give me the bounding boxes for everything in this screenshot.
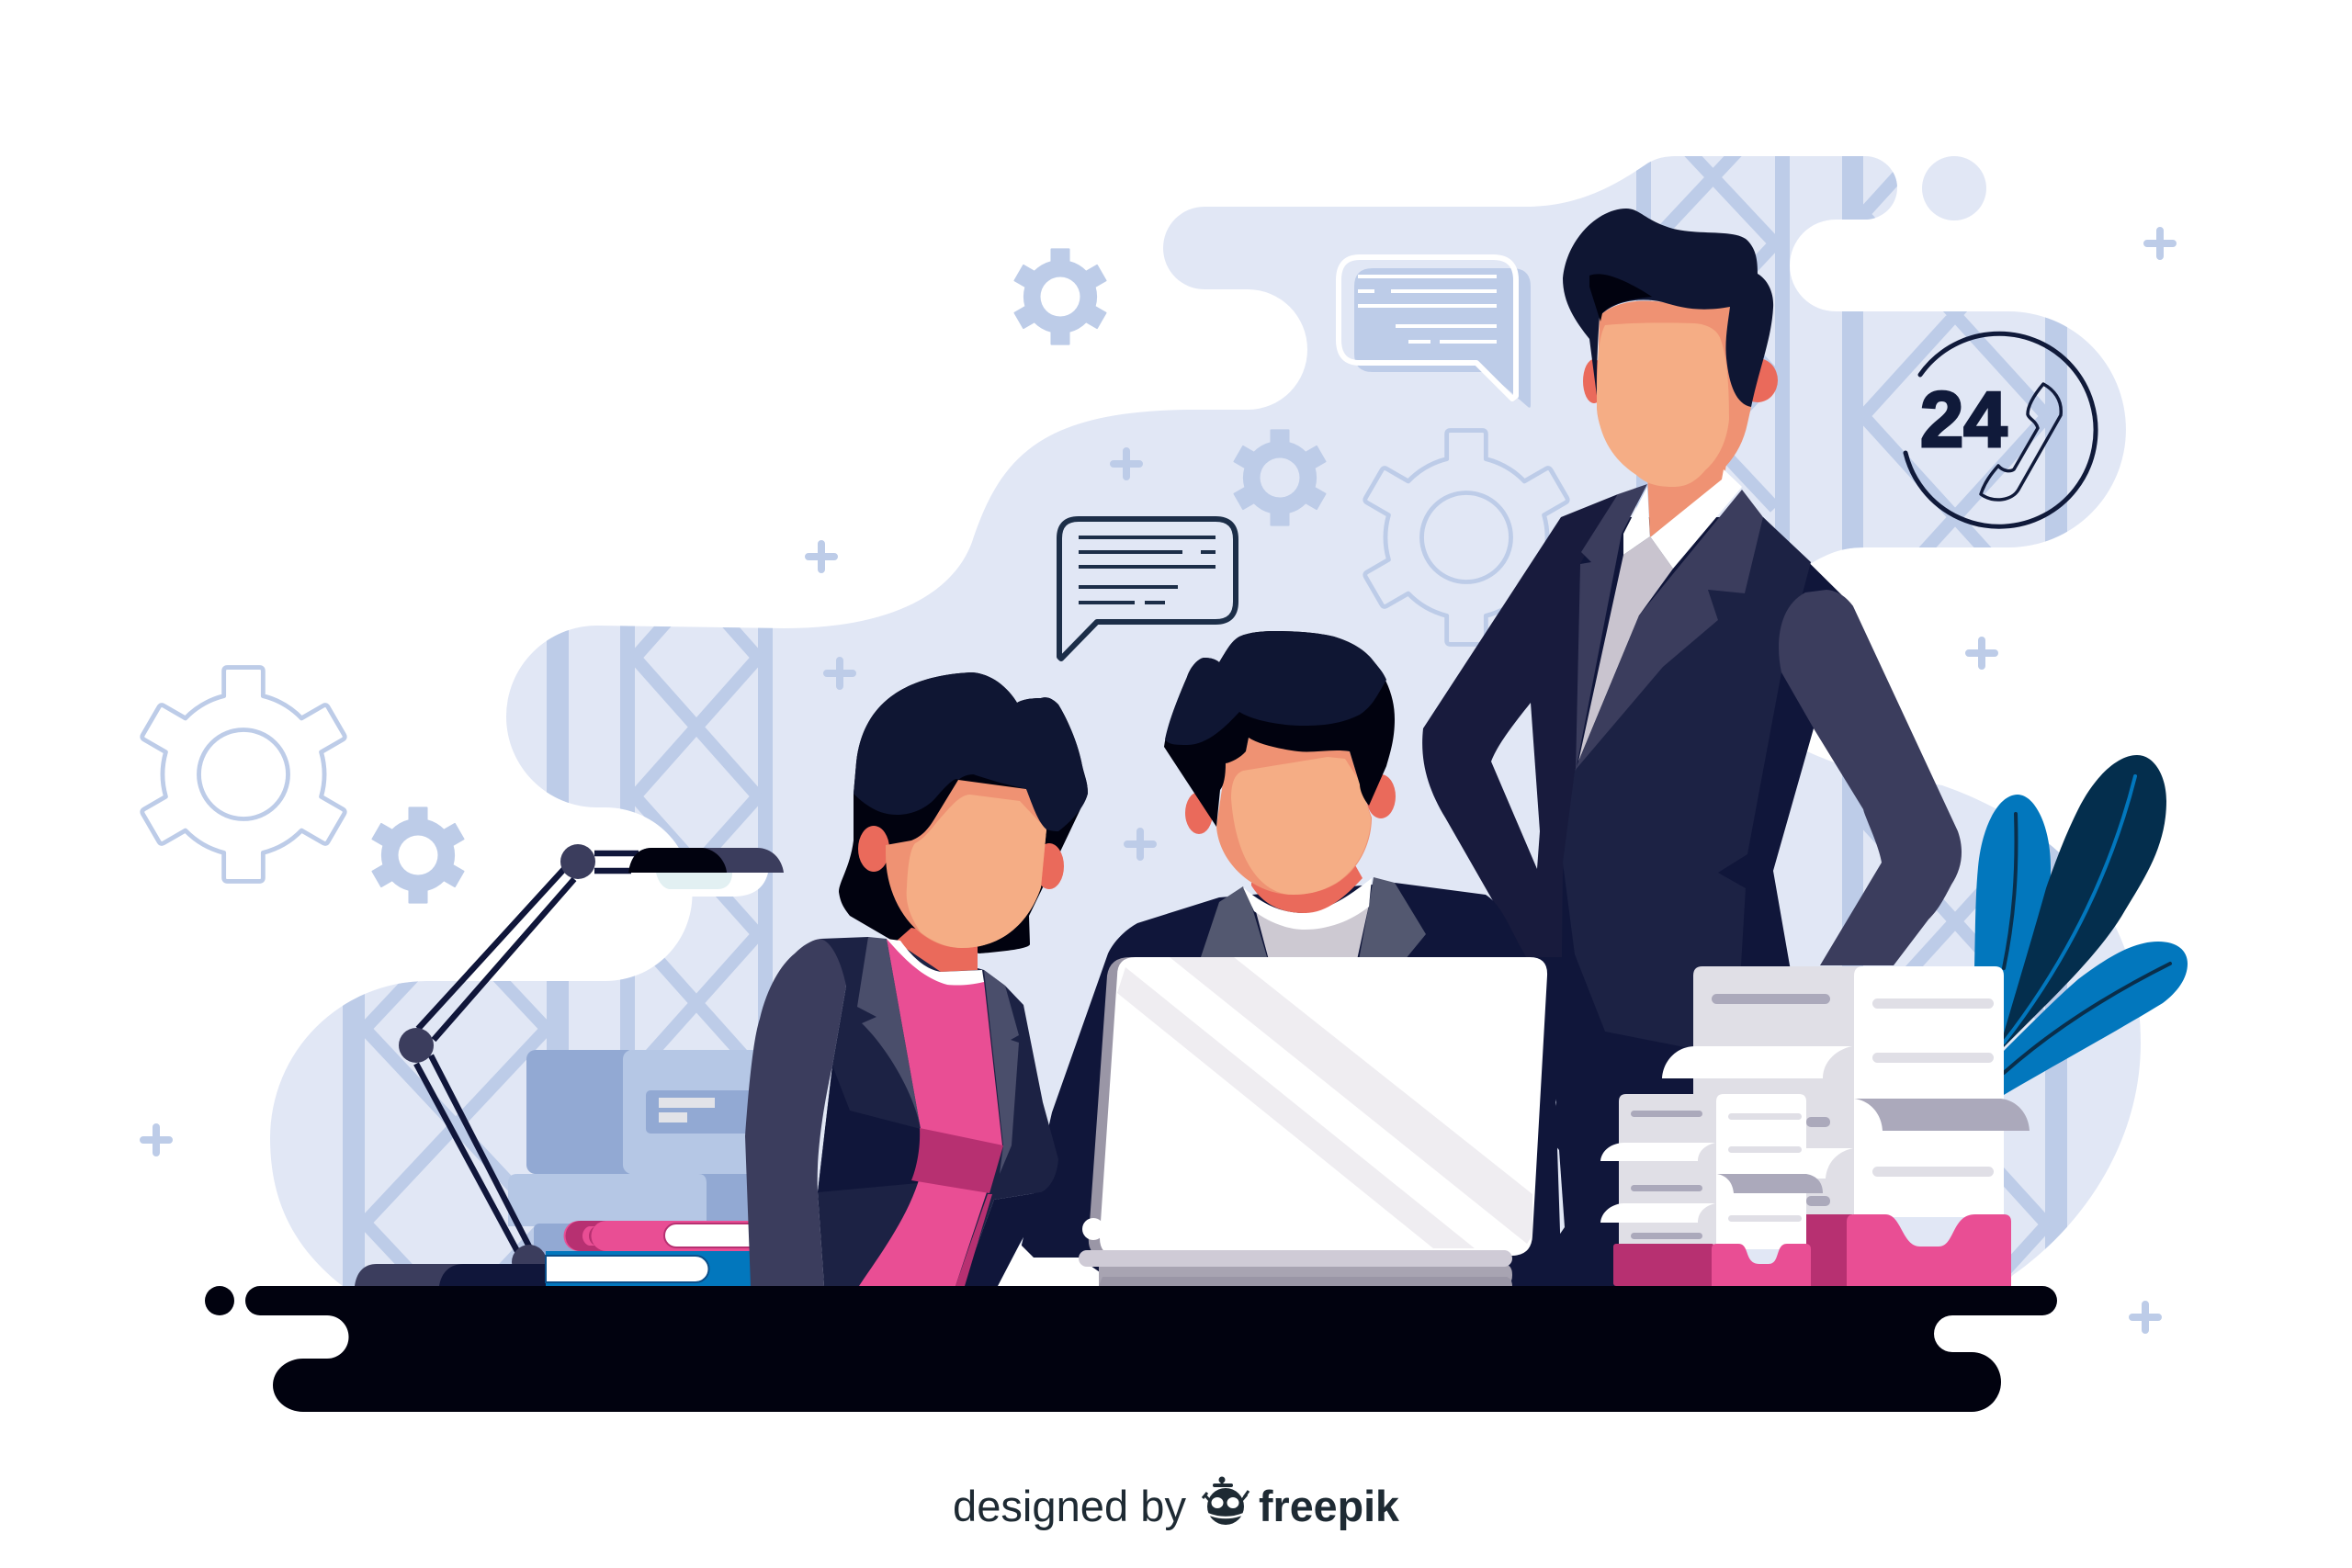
hair shadow — [1589, 274, 1652, 321]
small gray sheet — [1619, 1094, 1717, 1245]
hair top — [854, 672, 1088, 831]
collar — [887, 939, 984, 986]
white folded sheet — [1662, 1046, 1852, 1078]
big white sheet — [1854, 966, 2004, 1217]
desk dot — [205, 1286, 234, 1315]
gear outline middle — [1365, 431, 1567, 644]
ears — [1583, 359, 1605, 403]
small pink tray — [1613, 1244, 1714, 1286]
collar — [1243, 878, 1372, 930]
pants and dark suit — [1516, 517, 1853, 1286]
number 24: 24 — [1920, 377, 2007, 464]
collar — [1623, 469, 1742, 569]
left sleeve — [745, 939, 846, 1286]
lamp base — [355, 1264, 546, 1286]
speech bubble dark outline — [1059, 519, 1236, 659]
hair top — [1165, 631, 1386, 745]
desk lamp — [355, 844, 784, 1286]
pink band — [911, 1128, 1003, 1193]
small white sheet — [1716, 1094, 1806, 1249]
lamp arms — [416, 853, 639, 1251]
ears — [858, 826, 889, 872]
jacket — [1001, 883, 1562, 1286]
gear outline left — [142, 668, 345, 881]
laptop — [998, 957, 1547, 1286]
left lapel — [857, 937, 921, 1129]
hair — [1563, 209, 1773, 407]
phone handset — [1981, 384, 2061, 500]
big gray sheet — [1693, 966, 1865, 1217]
shirt — [1578, 536, 1673, 761]
seated man — [1001, 631, 1562, 1286]
right lapel — [984, 970, 1019, 1174]
face light — [1597, 322, 1729, 487]
freepik wordmark: freepik — [1259, 1482, 1400, 1530]
background circle — [1922, 156, 1986, 220]
ears — [1185, 792, 1213, 834]
gray fold — [1854, 1099, 2030, 1131]
leaf blue lower — [2004, 942, 2188, 1095]
desk — [245, 1286, 2057, 1412]
face light — [1231, 757, 1371, 895]
face base — [1597, 301, 1751, 487]
gap between arm and body — [1491, 703, 1540, 869]
suit torso — [1563, 517, 1811, 1049]
laptop back — [1089, 957, 1158, 1256]
standing man — [1422, 209, 1962, 1286]
laptop base — [1099, 1264, 1512, 1286]
lapels — [1200, 886, 1268, 960]
books — [546, 1221, 763, 1286]
hair dark — [1164, 631, 1395, 827]
designed by text: designed by — [953, 1482, 1186, 1530]
jacket body — [818, 937, 1058, 1286]
face light — [907, 795, 1046, 948]
freepik logo icon — [1203, 1477, 1249, 1525]
shirt — [1254, 905, 1369, 960]
back hair — [839, 672, 1088, 953]
icon: 24 hour phone — [1905, 333, 2096, 526]
face base — [886, 780, 1046, 948]
lamp joints — [560, 844, 595, 879]
neck — [1251, 863, 1363, 913]
plus marks — [143, 231, 2173, 1330]
speech bubble white outline — [1339, 257, 1531, 408]
leaf blue upper — [1974, 795, 2051, 1043]
suit left side and arm — [1422, 494, 1618, 957]
footer credit — [953, 1477, 1400, 1530]
laptop screen — [1100, 957, 1547, 1256]
neck — [1647, 459, 1727, 537]
gear solid left — [373, 807, 463, 903]
neck — [896, 928, 978, 972]
jacket lower shade — [962, 1192, 1041, 1286]
white paper under hand — [998, 1244, 1102, 1286]
face base — [1216, 738, 1372, 895]
boxes behind lamp — [508, 1050, 770, 1260]
leaf dark — [2004, 755, 2166, 1047]
gear solid top — [1015, 249, 1105, 344]
big pink tray — [1806, 1214, 1852, 1286]
steel lattice towers — [343, 156, 2067, 1286]
screen reflection stripes — [1170, 957, 1532, 1244]
jacket shadow — [818, 1066, 921, 1192]
document stacks — [1600, 966, 2030, 1286]
left lapel — [1576, 484, 1647, 771]
lamp shade — [628, 848, 784, 873]
background blob — [270, 156, 2141, 1295]
gear solid middle — [1235, 430, 1325, 525]
white light area under lamp — [643, 873, 768, 897]
gap at legs — [1525, 1126, 1565, 1274]
right lapel — [1575, 490, 1763, 771]
right arm sleeve — [1779, 590, 1962, 965]
white tab — [1082, 1218, 1104, 1240]
pink shadow — [956, 1194, 992, 1286]
pink top — [859, 939, 1002, 1286]
woman — [745, 672, 1088, 1286]
plant — [1974, 755, 2188, 1095]
